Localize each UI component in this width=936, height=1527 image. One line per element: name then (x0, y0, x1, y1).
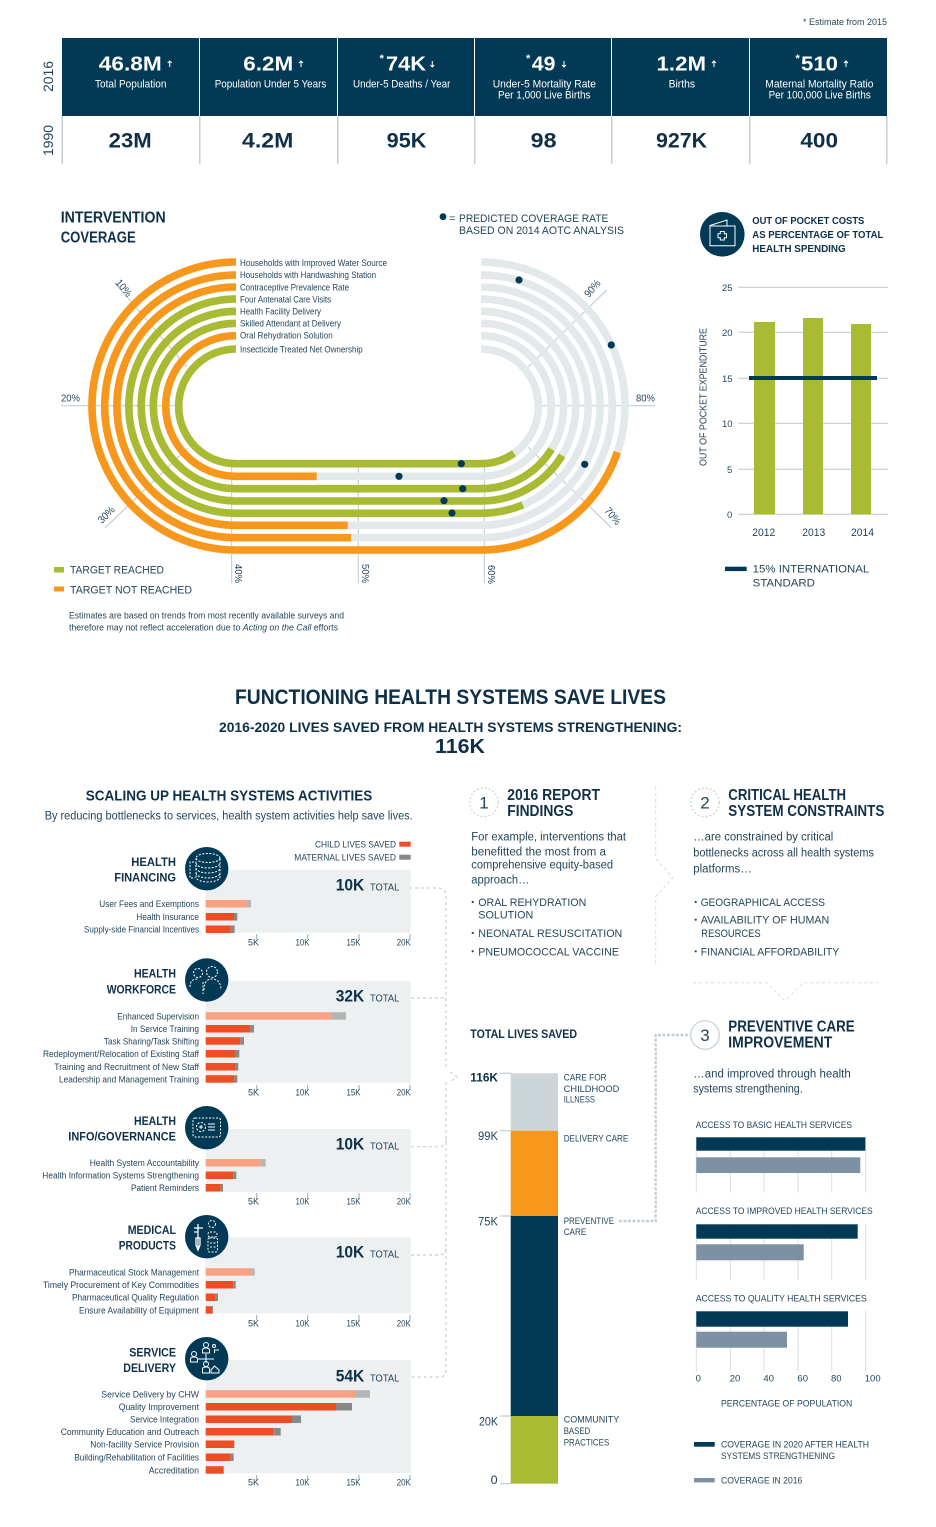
segment labels: ILLNESS (564, 1095, 595, 1105)
15 percent standard line (749, 376, 877, 380)
bullet list: ORAL REHYDRATION (478, 897, 586, 909)
heading: intervention coverage (61, 210, 166, 247)
main title: FUNCTIONING HEALTH SYSTEMS SAVE LIVES (235, 686, 666, 709)
legend: lives saved: MATERNAL LIVES SAVED (294, 852, 396, 863)
legend: target reached (54, 564, 192, 596)
bars: Task Sharing/Task Shifting (104, 1036, 199, 1046)
number badge 2: 2 (700, 794, 710, 812)
bars: Quality Improvement (119, 1402, 199, 1412)
heading: DELIVERY (123, 1361, 176, 1375)
bar chart: out of pocket expenditure: 5 (727, 465, 732, 476)
legend: target reached: TARGET REACHED (70, 564, 164, 576)
bars: Supply-side Financial Incentives (84, 925, 199, 935)
bars: Health Information Systems Strengthening (42, 1171, 199, 1181)
total 54K: 54K (336, 1367, 364, 1385)
bars (43, 1267, 255, 1315)
note: estimates (69, 611, 344, 633)
axis: 20K (397, 1087, 411, 1098)
segment: community based practices (511, 1416, 558, 1484)
track: handwashing station (105, 275, 351, 538)
track labels: Contraceptive Prevalence Rate (240, 282, 349, 292)
percent axis labels: 40% (232, 564, 244, 583)
bars: Health System Accountability (90, 1158, 199, 1168)
number badge 1: 1 (479, 794, 489, 812)
bar chart: out of pocket expenditure: 15 (722, 374, 733, 385)
stat: under-5 mortality rate: 49 (532, 52, 555, 76)
heading (728, 1018, 855, 1052)
total 116K: 116K (435, 736, 486, 758)
percent axis labels: 60% (485, 565, 497, 584)
axis: 5K (248, 938, 260, 949)
track labels: Households with Improved Water Source (240, 258, 387, 268)
legend: coverage: COVERAGE IN 2020 AFTER HEALTH (721, 1439, 869, 1450)
paragraph: comprehensive equity-based (471, 860, 613, 872)
percent axis labels: 10% (113, 277, 134, 299)
track: insecticide treated net ownership (179, 349, 514, 464)
icon: syringe and bottle (185, 1215, 228, 1258)
percent axis labels: 20% (61, 392, 80, 404)
total 54K: TOTAL (370, 1373, 400, 1384)
paragraph: …and improved through health (693, 1068, 851, 1080)
heading: out of pocket costs: HEALTH SPENDING (752, 243, 846, 255)
stat: under-5 mortality rate: 98 (531, 130, 557, 153)
total 10K: TOTAL (370, 1250, 400, 1261)
track labels: Oral Rehydration Solution (240, 331, 333, 341)
number badge 1 (470, 788, 498, 817)
heading: HEALTH (134, 1114, 176, 1128)
legend: 15 percent international standard: STANDARD (753, 578, 815, 590)
stat: under-5 mortality rate (493, 52, 596, 153)
bar chart: out of pocket expenditure (699, 283, 888, 539)
bullet list: AVAILABILITY OF HUMAN (701, 915, 829, 927)
legend: predicted coverage rate (440, 213, 624, 237)
number badge 3 (691, 1021, 719, 1049)
stat: maternal mortality ratio: 400 (800, 130, 838, 153)
panel: service delivery (61, 1337, 411, 1489)
bullet list (695, 897, 840, 958)
bullet list: RESOURCES (701, 928, 761, 940)
axis: 15K (346, 1319, 361, 1330)
x axis title: PERCENTAGE OF POPULATION (721, 1399, 852, 1410)
bars: Leadership and Management Training (59, 1074, 199, 1084)
heading: out of pocket costs (752, 215, 884, 255)
axis: 15K (346, 1478, 361, 1489)
group: improved health services: ACCESS TO IMPROVED HEALTH SERVICES (696, 1206, 873, 1217)
bars: Service Integration (130, 1415, 199, 1425)
heading: PREVENTIVE CARE (728, 1018, 855, 1035)
scale labels: 116K (470, 1070, 498, 1084)
paragraph: For example, interventions that (471, 832, 627, 844)
bars: Accreditation (149, 1465, 199, 1475)
segment: delivery care (511, 1131, 558, 1216)
track: contraceptive prevalence rate (117, 287, 348, 525)
year label 2016: 2016 (40, 61, 56, 92)
x axis labels (696, 1374, 881, 1385)
icon: connected people (185, 1337, 228, 1380)
heading (119, 1223, 176, 1253)
bars: Training and Recruitment of New Staff (54, 1062, 199, 1072)
bars: Community Education and Outreach (61, 1427, 199, 1437)
axis: 10K (296, 1087, 310, 1098)
segment labels: PRACTICES (564, 1438, 609, 1448)
paragraph: …are constrained by critical (693, 832, 833, 844)
legend: target reached: TARGET NOT REACHED (70, 584, 192, 596)
note: estimates: therefore may not reflect acceleration due to Acting on the Call efforts (69, 623, 338, 633)
paragraph (693, 832, 874, 876)
percent axis labels: 80% (636, 392, 655, 404)
group: quality health services (696, 1293, 867, 1348)
legend: predicted coverage rate: = (449, 213, 455, 225)
track: four antenatal care visits (129, 299, 523, 513)
stat: births: 927K (656, 130, 707, 153)
bars: In Service Training (131, 1024, 199, 1034)
y axis title: OUT OF POCKET EXPENDITURE (699, 328, 710, 466)
percent axis labels: 90% (582, 278, 604, 300)
bars: Timely Procurement of Key Commodities (43, 1280, 199, 1290)
number badge 3: 3 (700, 1026, 710, 1045)
paragraph: approach… (471, 874, 529, 886)
bars: Redeployment/Relocation of Existing Staff (43, 1049, 199, 1059)
icon: wallet with cross (700, 212, 745, 257)
bullet list: GEOGRAPHICAL ACCESS (701, 897, 825, 909)
bars (43, 1011, 346, 1084)
heading: INFO/GOVERNANCE (68, 1130, 176, 1144)
group: improved health services (696, 1206, 873, 1260)
track labels: Insecticide Treated Net Ownership (240, 345, 363, 355)
stacked bar: total lives saved (470, 1070, 628, 1487)
heading: 2016 REPORT (507, 787, 600, 804)
chart: intervention coverage racetrack (61, 258, 655, 584)
scale labels: 20K (479, 1415, 498, 1429)
axis: 10K (296, 1478, 310, 1489)
track labels (240, 258, 387, 355)
axis (248, 1085, 411, 1098)
year labels: 2013 (802, 527, 825, 539)
axis: 5K (248, 1319, 260, 1330)
year labels: 2012 (752, 527, 775, 539)
stat: under-5 deaths per year: * (380, 53, 385, 65)
axis (248, 934, 411, 949)
icon: document with cross (185, 1106, 228, 1149)
stat: population under 5 years: 6.2M (243, 52, 293, 76)
axis: 15K (346, 938, 361, 949)
stat: population under 5 years: Population Under 5 Years (215, 79, 327, 91)
icon: coins (185, 847, 228, 890)
subtitle: 2016-2020 LIVES SAVED FROM HEALTH SYSTEMS STRENGTHENING: (219, 719, 682, 735)
scale labels (470, 1070, 498, 1487)
total 10K (336, 877, 400, 895)
axis (248, 1475, 411, 1489)
bars: Service Delivery by CHW (101, 1389, 199, 1399)
chart: access to health services (696, 1120, 881, 1410)
axis: 20K (397, 1319, 411, 1330)
track: oral rehydration solution (166, 336, 317, 476)
heading (114, 855, 176, 885)
bar chart: out of pocket expenditure: 20 (722, 328, 733, 339)
bars: Pharmaceutical Quality Regulation (72, 1293, 199, 1303)
section 3: preventive care improvement (691, 1018, 855, 1096)
total 32K: 32K (336, 988, 364, 1006)
bars 2012 to 2014 (754, 318, 871, 514)
paragraph: systems strengthening. (693, 1084, 803, 1096)
heading: SYSTEM CONSTRAINTS (728, 803, 884, 820)
scale labels: 0 (491, 1473, 498, 1487)
percent axis labels: 70% (602, 505, 623, 527)
segment: care for childhood illness (511, 1073, 558, 1131)
axis: 5K (248, 1478, 260, 1489)
heading (507, 787, 600, 820)
heading: SERVICE (129, 1345, 176, 1359)
year labels: 2014 (851, 527, 874, 539)
total 10K: 10K (336, 877, 364, 895)
legend: 15 percent international standard: 15% INTERNATIONAL (753, 564, 869, 576)
stat: under-5 deaths per year: Under-5 Deaths / Year (353, 79, 451, 91)
paragraph (693, 1068, 851, 1096)
track backgrounds (92, 262, 625, 550)
bars: Patient Reminders (131, 1183, 199, 1193)
track labels: Skilled Attendant at Delivery (240, 319, 341, 329)
year labels (752, 527, 874, 539)
x axis labels: 100 (865, 1374, 881, 1385)
note: estimates: Estimates are based on trends from most recently available surveys and (69, 611, 344, 621)
bullet list: SOLUTION (478, 910, 533, 922)
percent axis labels (61, 277, 655, 584)
stat: total population: 46.8M (99, 52, 162, 76)
axis: 15K (346, 1196, 361, 1207)
track: improved water source (92, 262, 617, 550)
stat: total population: 23M (109, 130, 152, 153)
heading: scaling up health systems activities: SCALING UP HEALTH SYSTEMS ACTIVITIES (86, 788, 372, 805)
bar chart: out of pocket expenditure: 10 (722, 419, 733, 430)
heading: FINANCING (114, 871, 176, 885)
stat: under-5 mortality rate: Under-5 Mortality Rate (493, 79, 596, 91)
heading: out of pocket costs: OUT OF POCKET COSTS (752, 215, 864, 227)
segment: preventive care (511, 1216, 558, 1416)
footnote: estimate from 2015: * Estimate from 2015 (803, 17, 887, 28)
heading (123, 1345, 176, 1375)
segment labels: CARE FOR (564, 1072, 607, 1082)
bar chart: out of pocket expenditure: 0 (727, 510, 732, 521)
bar chart: out of pocket expenditure: 25 (722, 283, 733, 294)
stat: under-5 deaths per year: 95K (387, 130, 426, 153)
segment labels: PREVENTIVE (564, 1216, 614, 1226)
1990 row separators (62, 116, 888, 164)
bullet list (472, 897, 622, 958)
heading: total lives saved: TOTAL LIVES SAVED (470, 1029, 577, 1041)
x axis labels: 60 (797, 1374, 808, 1385)
bars: Building/Rehabilitation of Facilities (74, 1453, 199, 1463)
axis: 10K (296, 1319, 310, 1330)
legend: lives saved: CHILD LIVES SAVED (315, 840, 396, 851)
heading (728, 787, 884, 820)
stat: maternal mortality ratio: Maternal Mortality Ratio (765, 79, 874, 91)
number badge 2 (691, 788, 719, 817)
heading: out of pocket costs: AS PERCENTAGE OF TOTAL (752, 229, 884, 241)
stat: births: 1.2M (656, 52, 706, 76)
panel: health workforce (43, 958, 411, 1098)
total 10K (336, 1244, 400, 1262)
group: basic health services (696, 1120, 865, 1173)
segment labels: CHILDHOOD (564, 1084, 620, 1094)
stat: maternal mortality ratio (765, 52, 874, 153)
bullet list: PNEUMOCOCCAL VACCINE (478, 946, 619, 958)
stat: births (656, 52, 716, 153)
stat: total population (95, 52, 172, 153)
stat: population under 5 years: 4.2M (242, 130, 293, 153)
stat: under-5 deaths per year: 74K (386, 52, 426, 76)
total 10K: 10K (336, 1136, 364, 1154)
heading: CRITICAL HEALTH (728, 787, 846, 804)
bars: Non-facility Service Provision (90, 1440, 199, 1450)
heading: HEALTH (134, 967, 176, 981)
heading (68, 1114, 176, 1144)
predicted coverage dots (395, 276, 615, 517)
track: skilled attendant at delivery (153, 323, 552, 489)
heading: intervention coverage: COVERAGE (61, 230, 136, 247)
segment labels: DELIVERY CARE (564, 1133, 628, 1143)
segment labels (564, 1072, 628, 1448)
stat: under-5 mortality rate: Per 1,000 Live Births (498, 89, 591, 101)
axis (248, 1193, 411, 1207)
panel: health financing (84, 847, 411, 949)
axis (248, 1315, 411, 1330)
bars: Pharmaceutical Stock Management (69, 1267, 199, 1277)
connector: dashed divider with chevron (656, 787, 673, 964)
heading: IMPROVEMENT (728, 1035, 833, 1052)
stat: births: Births (669, 79, 695, 91)
legend: 15 percent international standard (725, 564, 869, 590)
legend: predicted coverage rate: PREDICTED COVERAGE RATE (459, 213, 608, 225)
stats table (40, 38, 888, 164)
heading: FINDINGS (507, 803, 573, 820)
intro text: By reducing bottlenecks to services, health system activities help save lives. (45, 810, 413, 822)
connector: preventive care to section 3 (619, 1035, 690, 1221)
heading: HEALTH (131, 855, 176, 869)
bars: Enhanced Supervision (117, 1011, 199, 1021)
total 10K (336, 1136, 400, 1154)
panel: medical products (43, 1215, 411, 1330)
bars: Ensure Availability of Equipment (79, 1305, 199, 1315)
section 1: 2016 report findings (470, 787, 627, 958)
percent axis labels: 50% (359, 564, 371, 583)
group: basic health services: ACCESS TO BASIC HEALTH SERVICES (696, 1120, 852, 1131)
axis: 10K (296, 938, 310, 949)
bars (84, 899, 251, 935)
stat: total population: Total Population (95, 79, 166, 91)
axis: 20K (397, 1478, 411, 1489)
section 2: critical health system constraints (691, 787, 884, 958)
total 10K: 10K (336, 1244, 364, 1262)
heading: MEDICAL (128, 1223, 176, 1237)
paragraph: bottlenecks across all health systems (693, 848, 874, 860)
legend: coverage (694, 1439, 869, 1486)
paragraph: platforms… (693, 864, 752, 876)
heading: intervention coverage: INTERVENTION (61, 210, 166, 227)
bars (61, 1389, 370, 1475)
stat header cell backgrounds (62, 38, 887, 116)
heading: PRODUCTS (119, 1239, 176, 1253)
stat: maternal mortality ratio: * (796, 53, 800, 65)
axis: 20K (397, 938, 411, 949)
paragraph (471, 832, 627, 886)
axis: 15K (346, 1087, 361, 1098)
scale labels: 75K (478, 1215, 498, 1229)
total 10K: TOTAL (370, 1142, 400, 1153)
bars: User Fees and Exemptions (99, 899, 199, 909)
paragraph: benefitted the most from a (471, 846, 607, 858)
bullet list: NEONATAL RESUSCITATION (478, 928, 622, 940)
legend: coverage: COVERAGE IN 2016 (721, 1475, 802, 1486)
legend: lives saved (294, 840, 411, 863)
legend: predicted coverage rate: BASED ON 2014 AOTC ANALYSIS (459, 225, 624, 237)
x axis labels: 80 (831, 1374, 842, 1385)
x axis labels: 20 (730, 1374, 740, 1385)
stat: maternal mortality ratio: Per 100,000 Live Births (769, 89, 871, 101)
stat: under-5 mortality rate: * (526, 53, 531, 65)
bars: Health Insurance (136, 912, 199, 922)
axis: 5K (248, 1196, 260, 1207)
axis: 20K (397, 1196, 411, 1207)
legend: coverage: SYSTEMS STRENGTHENING (721, 1451, 835, 1462)
bullet list: FINANCIAL AFFORDABILITY (701, 946, 840, 958)
total 32K: TOTAL (370, 994, 400, 1005)
track labels: Households with Handwashing Station (240, 270, 376, 280)
group: quality health services: ACCESS TO QUALITY HEALTH SERVICES (696, 1293, 867, 1304)
x axis labels: 0 (696, 1374, 701, 1385)
panel: health info and governance (42, 1106, 411, 1207)
axis: 5K (248, 1087, 260, 1098)
segment labels: CARE (564, 1227, 586, 1237)
track labels: Health Facility Delivery (240, 307, 321, 317)
heading: WORKFORCE (107, 982, 176, 996)
percent axis labels: 30% (96, 504, 118, 526)
stat: maternal mortality ratio: 510 (801, 52, 838, 76)
stat: under-5 deaths per year (353, 52, 451, 153)
connector: activity totals to total lives saved (403, 888, 457, 1377)
x axis labels: 40 (763, 1374, 774, 1385)
axis: 10K (296, 1196, 310, 1207)
track labels: Four Antenatal Care Visits (240, 295, 331, 305)
bars (42, 1158, 266, 1193)
connector: horizontal dashed divider with chevron (693, 983, 878, 1001)
year label 1990: 1990 (40, 125, 56, 156)
icon: people (185, 958, 228, 1002)
track: health facility delivery (141, 311, 562, 501)
total 54K (336, 1367, 400, 1385)
scale labels: 99K (478, 1129, 498, 1143)
heading (107, 967, 176, 996)
total 32K (336, 988, 400, 1006)
total 10K: TOTAL (370, 883, 400, 894)
segment labels: COMMUNITY (564, 1414, 619, 1424)
segment labels: BASED (564, 1426, 591, 1436)
stat: population under 5 years (215, 52, 327, 153)
